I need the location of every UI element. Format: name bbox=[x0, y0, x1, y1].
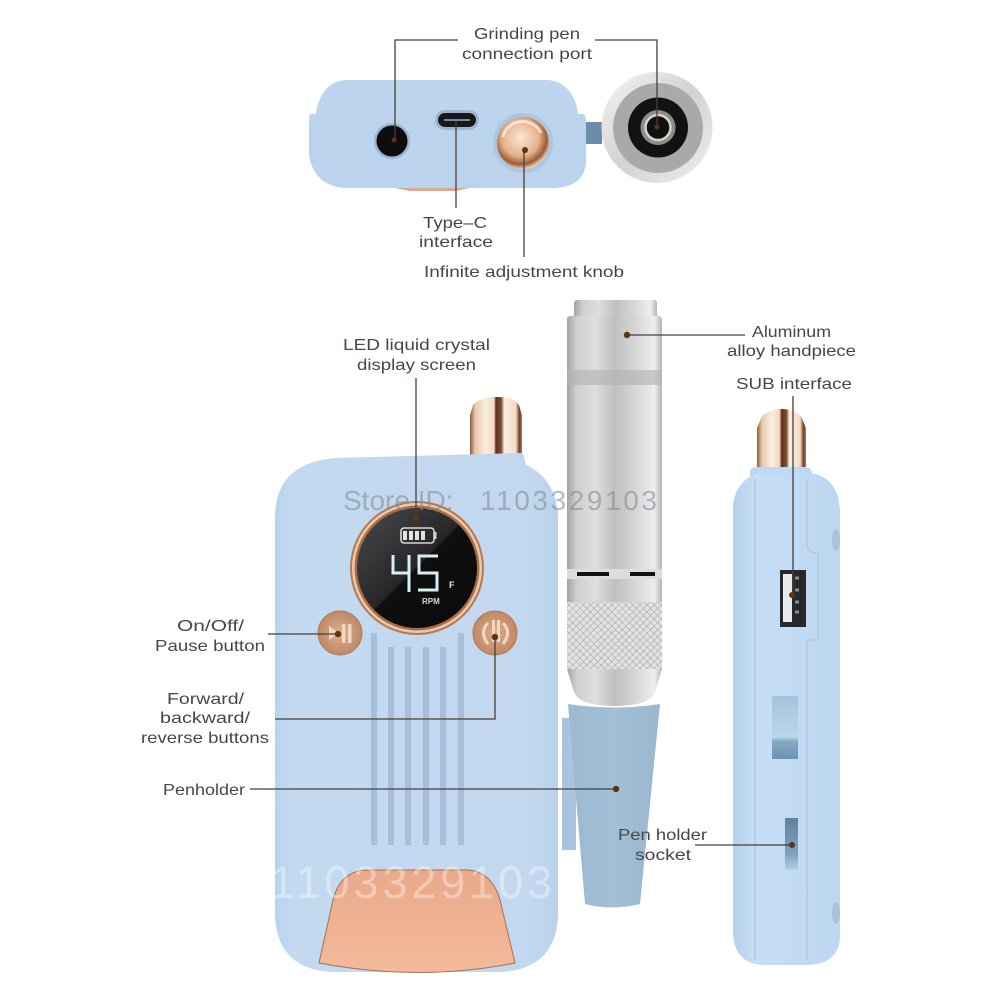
label: grinding pen port bbox=[462, 26, 593, 63]
label: pen holder socket: Pen holder bbox=[618, 827, 708, 844]
label: LED: display screen bbox=[357, 357, 476, 374]
label: LED bbox=[343, 337, 490, 374]
battery icon bbox=[401, 528, 436, 543]
knob on top bbox=[470, 397, 522, 456]
knob bbox=[757, 409, 806, 470]
label: pen holder socket: socket bbox=[635, 847, 692, 864]
jack port bbox=[374, 123, 410, 159]
label: type-c: interface bbox=[419, 234, 493, 251]
label: aluminum: Aluminum bbox=[752, 324, 831, 341]
label: penholder: Penholder bbox=[163, 782, 246, 799]
label: on/off: Pause button bbox=[155, 638, 265, 655]
label: forward: Forward/ bbox=[167, 691, 245, 708]
pause button bbox=[318, 610, 362, 656]
label: on/off: On/Off/ bbox=[177, 618, 245, 635]
label: type-c: Type–C bbox=[423, 215, 487, 232]
label: forward: reverse buttons bbox=[141, 730, 269, 747]
label: forward: backward/ bbox=[160, 710, 251, 727]
label: aluminum: alloy handpiece bbox=[727, 343, 856, 360]
copper base plate bbox=[319, 870, 515, 972]
label: grinding pen port: connection port bbox=[462, 46, 593, 63]
label: knob: Infinite adjustment knob bbox=[424, 264, 624, 281]
ribs bbox=[371, 633, 464, 845]
leader dots bbox=[335, 124, 795, 848]
label: type-c bbox=[419, 215, 493, 251]
label: on/off bbox=[155, 618, 265, 655]
label: pen holder socket bbox=[618, 827, 708, 864]
display: F bbox=[449, 580, 455, 590]
top view: handpiece connection port bbox=[602, 72, 712, 183]
adjustment knob bbox=[493, 113, 553, 173]
main device front bbox=[275, 397, 558, 972]
watermark: store id bbox=[343, 485, 657, 516]
slot bbox=[785, 818, 798, 870]
side notches bbox=[832, 529, 840, 924]
pen holder bbox=[562, 704, 660, 908]
label: SUB: SUB interface bbox=[736, 376, 852, 393]
display: RPM bbox=[422, 597, 440, 606]
USB-C port bbox=[435, 110, 479, 130]
slots bbox=[577, 572, 655, 576]
knurled grip bbox=[567, 602, 662, 669]
window bbox=[772, 696, 798, 759]
label: grinding pen port: Grinding pen bbox=[474, 26, 580, 43]
display bbox=[350, 501, 484, 635]
reverse button bbox=[472, 610, 518, 656]
watermark: number: 1103329103 bbox=[270, 857, 552, 908]
USB port bbox=[780, 570, 806, 627]
label: forward bbox=[141, 691, 269, 747]
handpiece bbox=[567, 300, 662, 706]
device side view bbox=[733, 409, 840, 965]
leader lines bbox=[250, 40, 793, 845]
watermark: store id: 1103329103 bbox=[480, 485, 657, 516]
label: aluminum bbox=[727, 324, 856, 360]
RPM digits bbox=[393, 555, 438, 592]
top view: device end bbox=[309, 80, 602, 191]
watermark: store id: Store ID: bbox=[343, 485, 453, 516]
label: LED: LED liquid crystal bbox=[343, 337, 490, 354]
icon: connector stub bbox=[586, 122, 602, 144]
